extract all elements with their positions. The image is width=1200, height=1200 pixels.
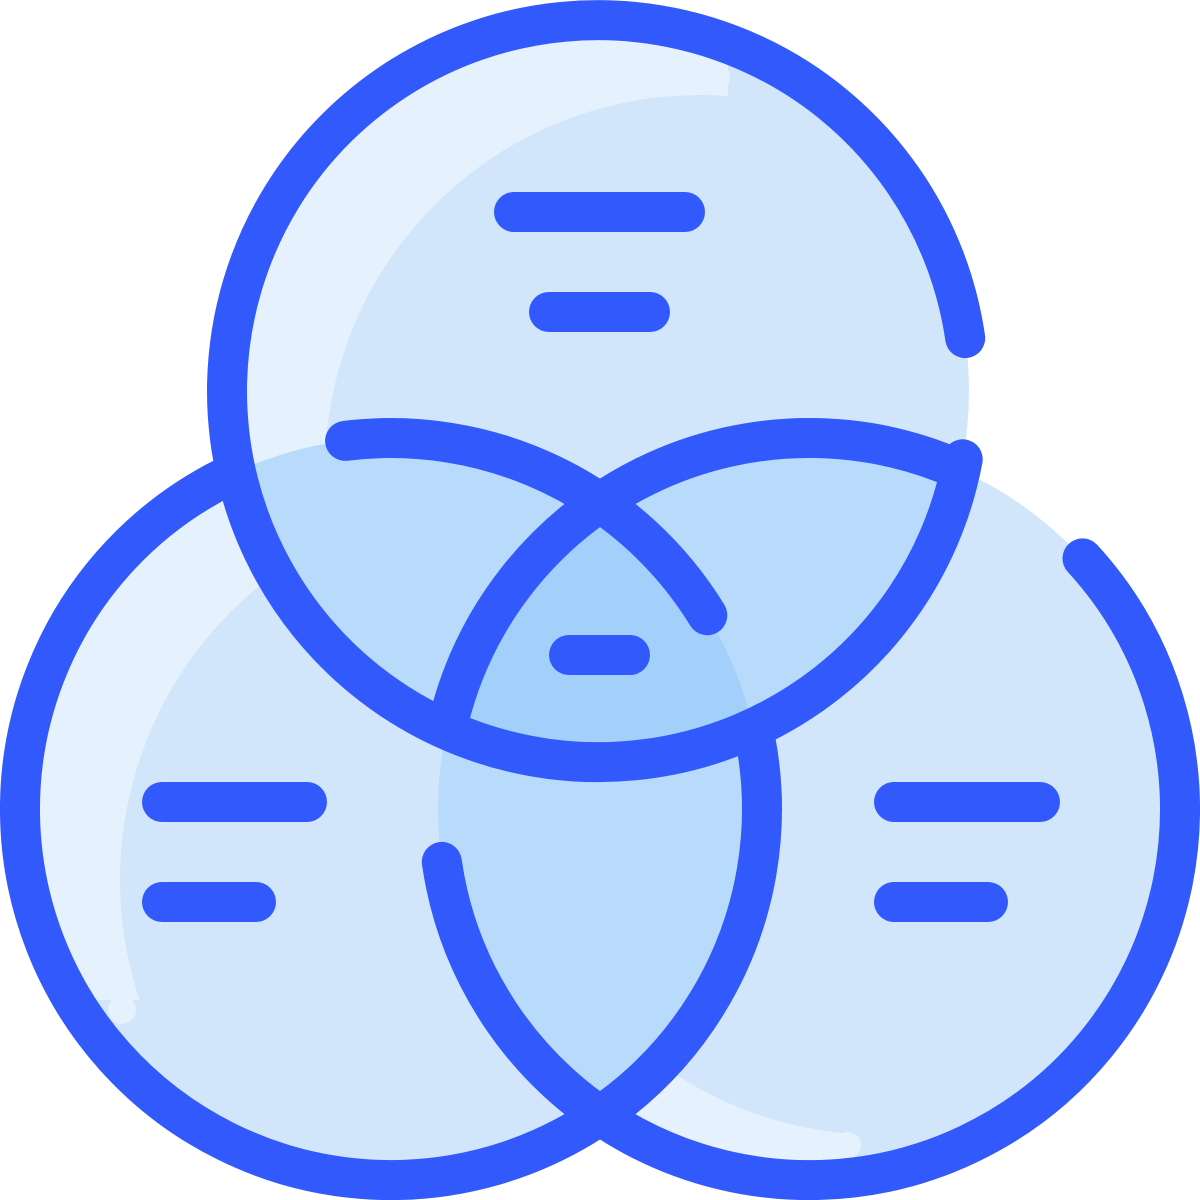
circle: top fill xyxy=(247,40,969,478)
circle: bottom left fill xyxy=(40,501,564,1160)
overlaps xyxy=(254,444,1200,1200)
circle: bottom right fill xyxy=(636,479,1160,1160)
text lines xyxy=(162,212,1040,902)
